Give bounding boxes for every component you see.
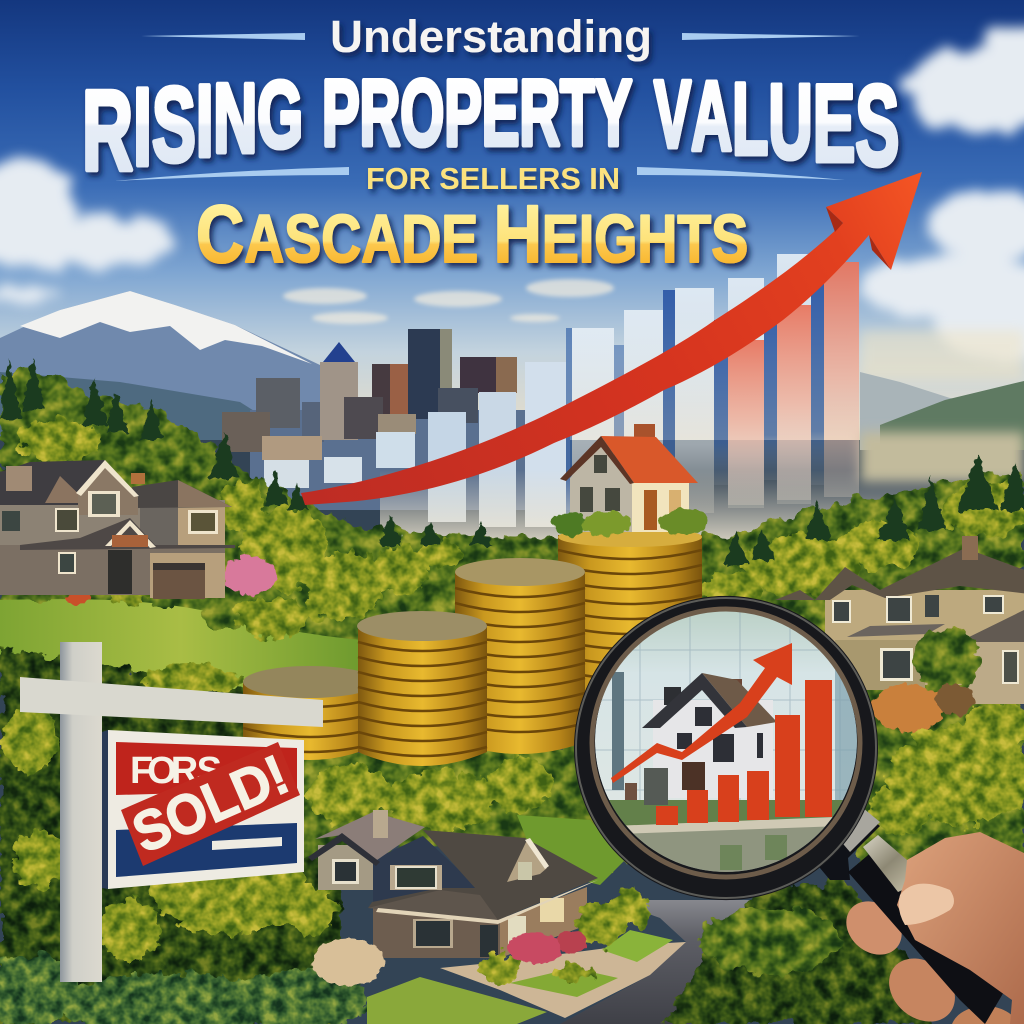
lens content [595, 612, 857, 872]
coin stack 4 [558, 527, 702, 701]
word: Rising: S [152, 65, 196, 184]
center and right foreground foliage [300, 680, 1024, 880]
house: left [0, 460, 235, 599]
lens rim [574, 596, 878, 900]
back lawn [517, 815, 625, 885]
title line: Cascade Heights: H [494, 187, 542, 280]
sky background [0, 0, 1024, 440]
sold banner: SOLD! [123, 742, 297, 865]
word: Values: V [654, 60, 691, 168]
house: right [775, 536, 1024, 704]
bottom right foliage [665, 880, 930, 1024]
far forest [0, 358, 1024, 670]
title line: Cascade Heights [196, 187, 748, 280]
distant hills right [860, 372, 1024, 482]
word: Rising: N [213, 64, 257, 174]
mountain [0, 291, 335, 440]
title line: For Sellers In: FOR SELLERS IN [366, 161, 620, 196]
house: bottom center [308, 810, 598, 958]
for sale text: FOR S [130, 750, 222, 792]
mini arrow [611, 643, 792, 783]
lawn [0, 599, 362, 690]
translucent rising bars [566, 254, 859, 523]
word: Values: E [813, 63, 855, 185]
for sale sign [20, 642, 323, 982]
word: Property: PROPERTY [322, 61, 632, 166]
word: Values: L [732, 62, 768, 176]
title line: Cascade Heights: ASCADE [244, 202, 494, 277]
word: Values: S [855, 62, 899, 189]
clouds [0, 24, 1024, 380]
title line: Rising Property Values [82, 60, 899, 195]
word: Values: A [691, 61, 732, 171]
city skyline [222, 329, 570, 527]
title line: Cascade Heights: C [196, 187, 244, 280]
decorative rule lines [115, 33, 860, 181]
foreground foliage left [0, 650, 370, 1024]
word: Rising: R [82, 68, 133, 195]
sign post [60, 642, 102, 982]
hand: thumb and palm [897, 832, 1024, 1024]
title line: Understanding: Understanding [330, 11, 652, 62]
word: Values: U [768, 64, 813, 181]
mini house [625, 673, 777, 805]
coin stack 2 [357, 611, 487, 766]
word: Rising: I [133, 66, 152, 189]
house on coins [553, 424, 707, 536]
hand: fingers behind handle [836, 890, 1019, 1024]
road and lawns [367, 900, 760, 1024]
title block [82, 11, 899, 280]
title line: Cascade Heights: EIGHTS [542, 202, 748, 277]
garden shrubs [312, 888, 650, 986]
crossbar [20, 677, 323, 727]
word: Rising: G [257, 60, 303, 167]
magnifying glass [574, 596, 1008, 1024]
rising red arrow [301, 172, 922, 505]
shrubs beside left house [14, 556, 329, 638]
right shrubs [872, 628, 981, 732]
coin stack 1 [243, 666, 377, 760]
mini bars [656, 680, 832, 825]
coin stacks [243, 527, 702, 766]
word: Rising: I [196, 63, 213, 178]
sign board [102, 730, 304, 889]
haze at skyline base [380, 470, 1000, 550]
coin stack 3 [455, 558, 585, 754]
lens ground [600, 800, 860, 830]
handle [815, 808, 1008, 1024]
